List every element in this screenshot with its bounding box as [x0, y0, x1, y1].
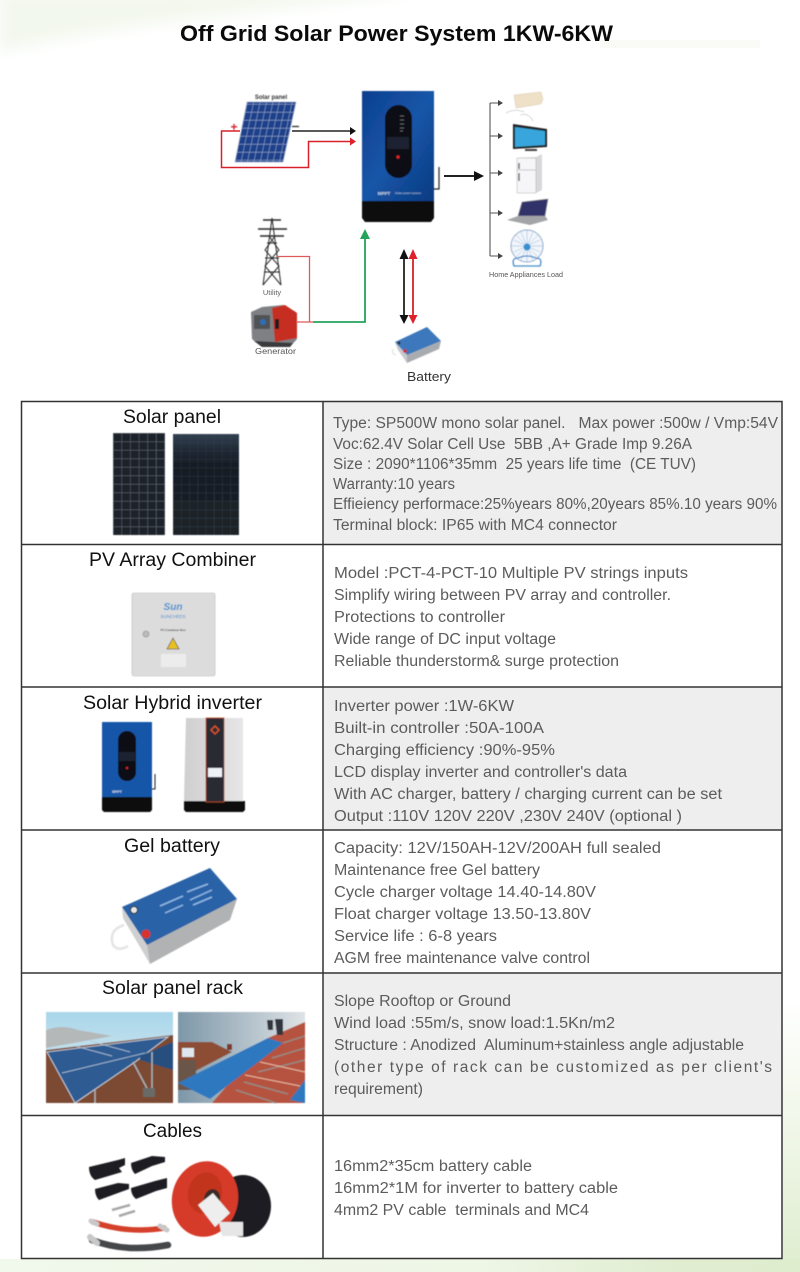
coil labels [198, 1193, 230, 1227]
specs: LCD display inverter and controller's data [334, 764, 627, 781]
icon: air conditioner [506, 92, 543, 121]
photo: blue inverter [102, 722, 155, 812]
icon: hybrid inverter: Solar power system [395, 191, 422, 195]
row: solar hybrid inverter [83, 693, 723, 825]
specs: Model :PCT-4-PCT-10 Multiple PV strings inputs [334, 565, 688, 582]
specs [333, 415, 779, 534]
photo: gel battery [112, 868, 237, 964]
specs: Voc:62.4V Solar Cell Use 5BB ,A+ Grade Imp 9.26A [333, 436, 693, 453]
specs: Type: SP500W mono solar panel. Max power :500w / Vmp:54V [333, 415, 779, 432]
specs: Cycle charger voltage 14.40-14.80V [334, 884, 597, 901]
specs: Terminal block: IP65 with MC4 connector [333, 517, 617, 534]
specs: Charging efficiency :90%-95% [334, 742, 555, 759]
MC4 connectors [89, 1156, 167, 1200]
specs: Effieiency performace:25%years 80%,20years 85%.10 years 90% [333, 496, 777, 513]
specs: requirement) [334, 1081, 423, 1098]
specs: Float charger voltage 13.50-13.80V [334, 906, 592, 923]
heading: Gel battery [124, 836, 221, 857]
specs: Structure : Anodized Aluminum+stainless angle adjustable [334, 1037, 744, 1054]
icon: hybrid inverter [362, 91, 439, 222]
specs: Size : 2090*1106*35mm 25 years life time (CE TUV) [333, 456, 696, 473]
photo: cables and connectors [89, 1155, 271, 1248]
specs: Wide range of DC input voltage [334, 631, 556, 648]
heading: Cables [143, 1121, 202, 1142]
row: solar panel rack [46, 978, 772, 1103]
arrow: inverter to loads [444, 171, 484, 181]
specs: Inverter power :1W-6KW [334, 698, 514, 715]
black battery cable bundle [90, 1237, 168, 1248]
specs [334, 698, 723, 825]
photo: blue inverter: MPPT [112, 790, 123, 794]
icon: diagram solar panel: Solar panel [255, 95, 288, 101]
icon: electric fan [511, 230, 543, 266]
specs: Service life : 6-8 years [334, 928, 497, 945]
heading: Solar Hybrid inverter [83, 693, 263, 714]
specs: Slope Rooftop or Ground [334, 993, 511, 1010]
icon: laptop [507, 199, 548, 225]
arrow: utility and generator feed [278, 229, 370, 322]
specs: Protections to controller [334, 609, 505, 626]
heading: Solar panel rack [102, 978, 244, 999]
specs: With AC charger, battery / charging current can be set [334, 786, 723, 803]
terminal pins [112, 1205, 135, 1216]
heading: PV Array Combiner [89, 550, 257, 571]
table grid [22, 402, 782, 1258]
specs: 4mm2 PV cable terminals and MC4 [334, 1202, 589, 1219]
specs: Reliable thunderstorm& surge protection [334, 653, 619, 670]
arrow: panel positive to inverter [222, 131, 356, 168]
specs: (other type of rack can be customized as per client's [334, 1059, 772, 1076]
specs: Wind load :55m/s, snow load:1.5Kn/m2 [334, 1015, 615, 1032]
photo: silver inverter [184, 718, 245, 812]
arrow: panel negative to inverter [292, 127, 356, 135]
icon: diagram solar panel: + [230, 120, 238, 134]
icon: television [513, 124, 547, 151]
row: solar panel [113, 407, 779, 535]
heading: Solar panel [123, 407, 221, 428]
specs [334, 840, 661, 967]
specs [334, 1158, 618, 1219]
label: utility: Utility [263, 288, 281, 297]
row: gel battery [112, 836, 661, 967]
icon: diagram battery [392, 327, 441, 363]
row: PV array combiner [89, 550, 688, 676]
label: generator: Generator [255, 346, 296, 356]
specs: 16mm2*35cm battery cable [334, 1158, 532, 1175]
icon: refrigerator [517, 154, 542, 193]
label: battery: Battery [407, 369, 452, 384]
specs: Capacity: 12V/150AH-12V/200AH full sealed [334, 840, 661, 857]
icon: utility tower [258, 218, 287, 285]
specs [334, 993, 772, 1098]
arrow: load distribution bus [490, 100, 503, 259]
system wiring diagram [222, 91, 563, 384]
photo: combiner box: PV Combiner Box [160, 628, 186, 632]
icon: diagram solar panel [230, 95, 299, 162]
specs: Warranty:10 years [333, 476, 455, 493]
arrow: battery black two-way [400, 249, 408, 324]
label: home appliances load: Home Appliances Load [489, 270, 563, 279]
icon: hybrid inverter: MPPT [378, 191, 390, 196]
photo: rooftop rack [178, 1012, 305, 1103]
title: Off Grid Solar Power System 1KW-6KW [180, 21, 613, 46]
specs: Output :110V 120V 220V ,230V 240V (optional ) [334, 808, 682, 825]
photo: combiner box: Sun [164, 602, 182, 613]
photo: combiner box [132, 593, 215, 676]
red battery cable bundle [91, 1221, 167, 1230]
photo: ground-mounted rack [46, 1012, 173, 1103]
black cable coil [215, 1175, 271, 1237]
row: cables [89, 1121, 618, 1248]
spec table [22, 402, 782, 1259]
table cell backgrounds [22, 402, 782, 1259]
photo: poly panel [173, 434, 239, 535]
red cable coil [165, 1155, 245, 1243]
specs: Simplify wiring between PV array and controller. [334, 587, 671, 604]
photo: mono panel [113, 433, 165, 535]
photo: combiner box: SUNCHEES [160, 614, 186, 619]
arrow: battery red two-way [408, 249, 418, 324]
icon: generator [251, 305, 297, 347]
specs [334, 565, 688, 670]
specs: Maintenance free Gel battery [334, 862, 540, 879]
specs: Built-in controller :50A-100A [334, 720, 545, 737]
specs: AGM free maintenance valve control [334, 950, 590, 967]
specs: 16mm2*1M for inverter to battery cable [334, 1180, 618, 1197]
